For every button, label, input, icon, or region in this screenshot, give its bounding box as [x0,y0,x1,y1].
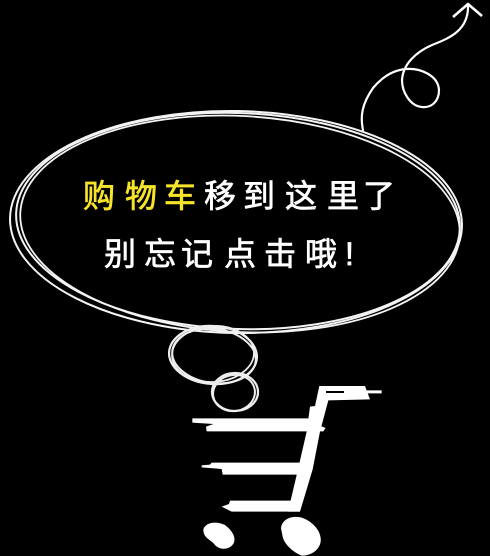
small thought bubble circles [167,323,259,414]
cart left wheel [203,523,234,549]
cart handle tip [360,390,382,393]
cart bottom bar [222,501,300,512]
thought bubble: large sketched oval [8,105,465,343]
cart top bar [192,418,326,431]
cart handle and pole [288,386,370,512]
looping arrow pointing up right [362,4,482,130]
message text [83,178,395,272]
cart right wheel [281,517,321,556]
cart middle bar [202,463,313,475]
icon: shopping cart [192,386,382,556]
highlighted text: shopping cart: 购物车 [83,178,196,214]
line 1 text: 移到这里了 [204,178,395,214]
line 2 text: 别忘记点击哦! [104,236,354,272]
